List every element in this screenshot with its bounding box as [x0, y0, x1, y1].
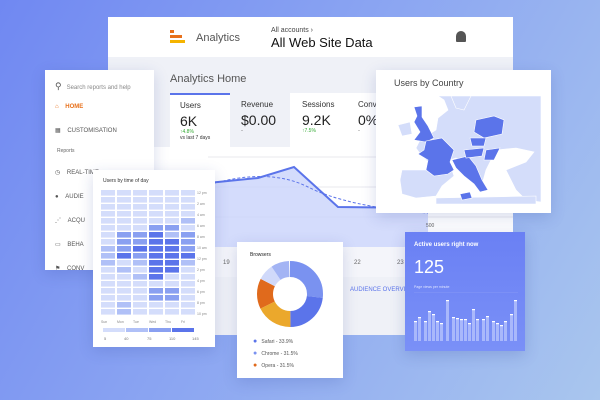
- heatmap: 2 am: [197, 202, 205, 206]
- heatmap: 6 pm: [197, 290, 205, 294]
- heatmap: 10 pm: [197, 312, 207, 316]
- heatmap: Thu: [165, 320, 171, 324]
- heatmap: Wed: [149, 320, 156, 324]
- page title: Analytics Home: [170, 73, 246, 85]
- metric: users: ↑4.8%: [180, 129, 194, 135]
- metric: conversions: [352, 93, 412, 149]
- account selector: All Web Site Data: [271, 35, 373, 50]
- line chart: 22: [354, 260, 361, 266]
- metric: users: [170, 93, 230, 149]
- legend: ● Opera - 31.5%: [253, 362, 294, 369]
- metric: sessions: 9.2K: [302, 112, 331, 128]
- bar chart: [414, 292, 518, 341]
- audience overview link: AUDIENCE OVERVIEW: [350, 287, 415, 293]
- panel: users by time of day: [93, 170, 215, 347]
- legend: ● Safari - 33.9%: [253, 338, 293, 345]
- line chart: 23: [397, 260, 404, 266]
- highlighted countries: [414, 106, 504, 200]
- heatmap: 4 am: [197, 213, 205, 217]
- nav items: ● AUDIE: [55, 194, 84, 200]
- heatmap: 12 pm: [197, 257, 207, 261]
- metric: conversions: -: [358, 128, 360, 134]
- heatmap: 6 am: [197, 224, 205, 228]
- heatmap: 5: [104, 336, 107, 341]
- header bar: [108, 17, 513, 57]
- heading: Users by Country: [394, 78, 464, 88]
- heatmap: 4 pm: [197, 279, 205, 283]
- account selector: All accounts ›: [271, 27, 313, 34]
- heatmap: Fri: [181, 320, 185, 324]
- heading: Active users right now: [414, 242, 478, 248]
- line chart: 19: [223, 260, 230, 266]
- heatmap: Sun: [101, 320, 107, 324]
- panel: active users right now: [405, 232, 525, 351]
- icon: bell: [456, 31, 466, 42]
- metric: sessions: ↑7.5%: [302, 128, 316, 134]
- heatmap: 2 pm: [197, 268, 205, 272]
- app name: Analytics: [196, 32, 240, 44]
- heatmap: 110: [169, 336, 176, 341]
- metric tabs: [170, 93, 381, 147]
- line chart: [154, 147, 513, 266]
- line chart: 500: [426, 223, 435, 229]
- subheading: Page views per minute: [414, 285, 449, 289]
- heading: Users by time of day: [103, 178, 149, 184]
- nav items: ⚑ CONV: [55, 266, 84, 272]
- heading: Browsers: [250, 252, 271, 258]
- heatmap: 75: [147, 336, 152, 341]
- heatmap: Mon: [117, 320, 124, 324]
- nav: customisation: ▦ CUSTOMISATION: [55, 128, 117, 134]
- reports label: Reports: [57, 148, 75, 154]
- sidebar nav: [45, 70, 154, 270]
- nav: home: ⌂ HOME: [55, 104, 83, 110]
- map of europe: [398, 96, 541, 204]
- nav items: ⋰ ACQU: [55, 218, 85, 224]
- metric: conversions: Conve: [358, 100, 381, 109]
- metric: sessions: Sessions: [302, 100, 334, 109]
- metric: conversions: 0%: [358, 112, 378, 128]
- legend: [253, 338, 298, 369]
- heatmap: 12 pm: [197, 191, 207, 195]
- nav items: [55, 170, 99, 272]
- heatmap: 10 am: [197, 246, 207, 250]
- metric: revenue: Revenue: [241, 100, 273, 109]
- heatmap: Tue: [133, 320, 139, 324]
- donut chart: [257, 261, 323, 327]
- heatmap: 8 pm: [197, 301, 205, 305]
- account selector: [271, 26, 373, 50]
- heatmap: 40: [124, 336, 129, 341]
- search: ⚲ Search reports and help: [55, 81, 131, 91]
- nav items: ▭ BEHA: [55, 242, 84, 248]
- nav items: ◷ REAL-TIME: [55, 170, 99, 176]
- metric: users: vs last 7 days: [180, 135, 210, 141]
- metric: users: Users: [180, 101, 201, 110]
- metric: revenue: $0.00: [241, 112, 276, 128]
- panel: users by country: [376, 70, 551, 213]
- heatmap: 8 am: [197, 235, 205, 239]
- metric: sessions: [290, 93, 352, 149]
- heatmap: [101, 190, 207, 341]
- metric: revenue: -: [241, 128, 243, 134]
- main dashboard panel: [108, 17, 513, 335]
- heatmap: 145: [192, 336, 199, 341]
- icon: analytics logo: [170, 30, 185, 43]
- big number: 125: [414, 257, 444, 277]
- panel: browsers donut: [237, 242, 343, 378]
- metric: users: 6K: [180, 113, 197, 129]
- legend: ● Chrome - 31.5%: [253, 350, 298, 357]
- metric: revenue: [230, 93, 290, 149]
